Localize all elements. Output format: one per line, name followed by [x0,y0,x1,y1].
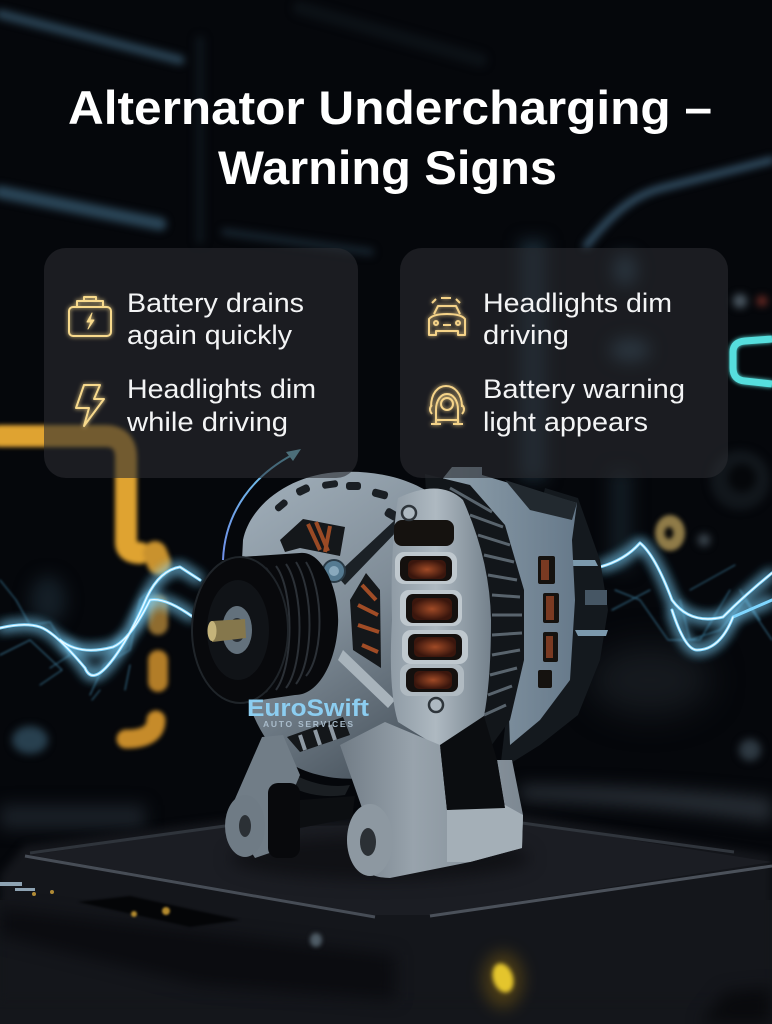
brand logo: AUTO SERVICES [263,719,353,729]
top vents [274,480,400,522]
rear housing [440,467,577,745]
bolt near pulley [323,560,345,582]
title [68,82,712,195]
text: battery drains: again quickly [127,320,293,350]
text: battery warning light appears: Battery warning [483,374,685,404]
glowing yellow conduit [0,436,159,739]
lower vents [283,770,350,796]
rear end cap [500,488,608,770]
spoke [336,520,400,585]
panel: left warning signs [44,248,358,478]
brass shaft [208,619,246,642]
top opening with windings [280,519,345,556]
title: Warning Signs [218,142,557,195]
curved arrow [223,449,301,560]
bottom opening [287,717,350,752]
text: battery warning light appears: light appears [483,407,648,437]
right foot and bracket [340,716,523,878]
icon: battery [69,297,111,336]
right opening with windings [350,573,381,668]
cyan neon indicator [733,339,772,384]
icon: lightning bolt [76,385,104,426]
amber status light [483,952,523,1008]
base plate [25,823,772,917]
front housing [238,472,470,796]
text: headlights dim driving: Headlights dim [483,288,672,318]
text: headlights dim while driving: Headlights dim [127,374,316,404]
control panel discs [12,294,770,761]
text: headlights dim driving: driving [483,320,569,350]
brass ring [655,515,685,551]
lightning arcs [0,543,772,700]
silver band with slots [391,488,491,748]
icon: battery warning light [430,386,464,424]
brand logo: EuroSwift [247,695,369,722]
alternator [192,467,608,878]
panel: right warning signs [400,248,728,478]
text: headlights dim while driving: while driving [126,407,288,437]
work surface and base plate [0,815,772,1024]
title: Alternator Undercharging – [68,82,712,135]
mounting feet [225,716,523,878]
left foot [225,735,355,858]
pulley [192,553,338,703]
text: battery drains: Battery drains [127,288,304,318]
icon: car [429,298,465,335]
cooling fins [425,474,524,775]
